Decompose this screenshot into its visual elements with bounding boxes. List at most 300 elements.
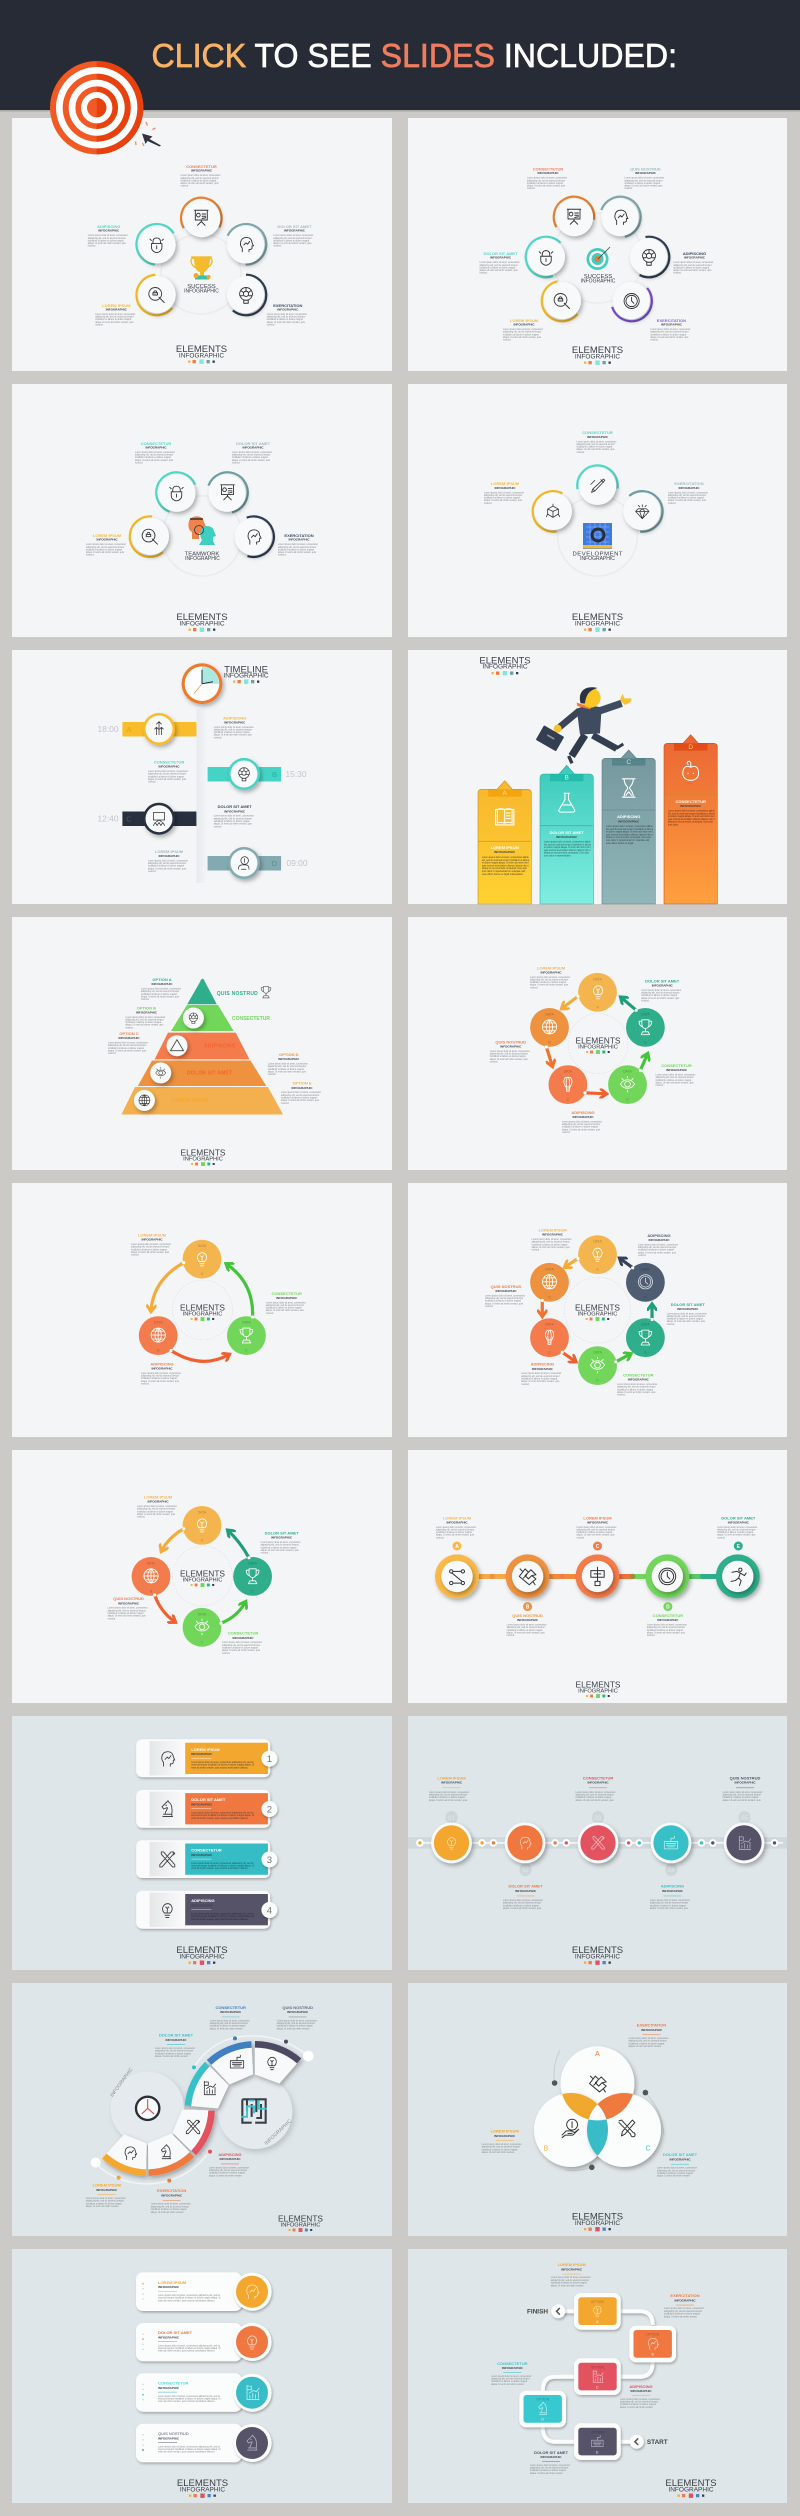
panel: slide 16 overlapping circles — [408, 1983, 787, 2236]
card 1: eiusmod tempor incididunt ut labore et dolore magna aliqua. Ut — [158, 2297, 221, 2300]
text block: dolor sit amet: aliqua. Ut enim ad minim veniam, quis — [667, 1320, 706, 1323]
pyramid layers — [121, 979, 283, 1114]
text block: consectetur: aliqua. Ut enim ad minim veniam, quis — [576, 448, 615, 451]
text block: lorem ipsum: adipiscing elit, sed do eiusmod tempor — [86, 2200, 124, 2203]
text block: quis nostrud: QUIS NOSTRUD — [113, 1596, 144, 1601]
icon: chess knight — [161, 2145, 171, 2159]
node A: A — [201, 1272, 204, 1276]
text block: lorem ipsum C: INFOGRAPHIC — [587, 1520, 609, 1524]
text block: exercitation: Lorem ipsum dolor sit amet, consectetur — [664, 2307, 704, 2310]
text block: lorem ipsum: INFOGRAPHIC — [561, 2267, 583, 2271]
box C: C — [596, 2385, 599, 2389]
text block: consectetur: CONSECTETUR — [228, 1631, 258, 1636]
text block: quis nostrud: adipiscing elit, sed do eiusmod tempor — [507, 1626, 545, 1629]
text block: lorem ipsum: adipiscing elit, sed do eiusmod tempor — [429, 1794, 468, 1797]
text block: lorem ipsum: nostrud. — [86, 554, 95, 557]
text block: option D: incididunt ut labore et dolore magna — [268, 1068, 304, 1071]
text block: option E: incididunt ut labore et dolore magna — [281, 1096, 318, 1099]
text block: exercitation: adipiscing elit, sed do eiusmod tempor — [668, 494, 707, 497]
text block: dolor sit amet: aliqua. Ut enim ad minim veniam, quis — [641, 997, 680, 1000]
text block: consectetur: CONSECTETUR — [186, 164, 217, 169]
center logo: INFOGRAPHIC — [578, 1311, 617, 1317]
text block: option D: OPTION D — [279, 1052, 299, 1057]
text block: lorem ipsum — [86, 2182, 126, 2208]
panel: slide 6 bars and runner — [408, 650, 787, 904]
text block: consectetur: adipiscing elit, sed do eiusmod tempor — [135, 454, 174, 457]
text block: adipiscing: aliqua. Ut enim ad minim veniam. — [209, 2174, 243, 2177]
node: lock — [150, 467, 203, 519]
text block: lorem ipsum: Lorem ipsum dolor sit amet, consectetur — [551, 2276, 591, 2279]
text block: adipiscing: ADIPISCING — [97, 224, 120, 229]
text block: quis nostrud: Lorem ipsum dolor sit amet, consectetur — [490, 1050, 530, 1053]
text block: quis nostrud: QUIS NOSTRUD — [495, 1039, 526, 1044]
text block: quis nostrud: aliqua. Ut enim ad minim veniam. — [277, 2027, 310, 2030]
center title — [581, 274, 616, 284]
card 2: Lorem ipsum dolor sit amet, consectetur adipiscing elit, sed do — [158, 2344, 221, 2347]
card 4: INFOGRAPHIC — [158, 2436, 180, 2440]
text block: dolor sit amet: nostrud. — [717, 1536, 726, 1539]
panel: slide 5 timeline — [12, 650, 392, 904]
text block: exercitation: adipiscing elit, sed do eiusmod tempor — [267, 316, 305, 319]
text block: adipiscing lower — [521, 1362, 562, 1386]
bar A: irure dolor in reprehenderit in voluptate velit — [482, 870, 526, 873]
text block: consectetur: nostrud. — [656, 1084, 664, 1087]
node C — [530, 1318, 569, 1357]
bar D: CONSECTETUR — [675, 799, 706, 804]
node B — [530, 1263, 569, 1302]
text block: lorem ipsum: incididunt ut labore et dolore magna — [429, 1796, 466, 1799]
text block: exercitation: aliqua. Ut enim ad minim veniam. — [664, 2315, 698, 2318]
text block: quis nostrud: QUIS NOSTRUD — [630, 166, 661, 172]
node: diamond — [614, 483, 671, 540]
footer logo — [177, 2478, 228, 2498]
text block: lorem ipsum: LOREM IPSUM — [93, 2182, 121, 2188]
disc 2 — [505, 1822, 545, 1863]
node B — [530, 1008, 569, 1047]
text block: dolor sit amet: DOLOR SIT AMET — [218, 804, 252, 809]
footer logo: INFOGRAPHIC — [179, 620, 225, 628]
center logo — [575, 1302, 620, 1321]
row D: band and node: 09:00 — [287, 858, 308, 868]
text block: consectetur — [222, 1631, 262, 1655]
card 2: INFOGRAPHIC — [158, 2335, 180, 2339]
footer logo: INFOGRAPHIC — [575, 1954, 620, 1960]
text block: dolor sit amet: DOLOR SIT AMET — [534, 2450, 569, 2455]
text block: dolor sit amet — [503, 1884, 543, 1910]
node A: A — [201, 1538, 204, 1542]
node: head — [594, 191, 646, 243]
card 3: enim ad minim veniam, quis nostrud exercitation ullamco. — [158, 2400, 216, 2403]
text block: adipiscing: nostrud. — [214, 736, 222, 739]
text block: option A — [141, 977, 181, 1001]
text block: quis nostrud: incididunt ut labore et dolore magna — [485, 1300, 522, 1303]
card 2: DOLOR SIT AMET — [158, 2330, 193, 2335]
text block: consectetur: INFOGRAPHIC — [146, 445, 167, 449]
node: pen — [574, 462, 621, 509]
card 1 — [136, 2272, 272, 2311]
text block: option D: aliqua. Ut enim ad minim veniam, quis — [268, 1071, 307, 1074]
text block: dolor sit amet: nostrud. — [480, 272, 488, 275]
number tabs: 05 — [741, 1816, 748, 1822]
bar B: B — [565, 775, 569, 782]
text block: adipiscing: Lorem ipsum dolor sit amet, consectetur — [214, 726, 254, 729]
layer labels: LOREM IPSUM — [171, 1098, 208, 1104]
text block: lorem ipsum C: aliqua. Ut enim ad minim veniam, quis — [576, 1534, 615, 1537]
text block: quis nostrud: Lorem ipsum dolor sit amet, consectetur — [507, 1624, 547, 1627]
node: top presentation — [174, 190, 229, 246]
text block: adipiscing: adipiscing elit, sed do eiusmod tempor — [620, 2401, 659, 2404]
text block: lorem ipsum: INFOGRAPHIC — [148, 1500, 169, 1504]
text block: adipiscing: nostrud. — [141, 1383, 150, 1386]
text block: quis nostrud: incididunt ut labore et dolore magna — [507, 1629, 543, 1632]
text block: consectetur: INFOGRAPHIC — [220, 2010, 242, 2014]
header banner — [0, 0, 800, 112]
arrow: C to D — [219, 1602, 246, 1625]
node B: DATA — [545, 1267, 555, 1271]
text block: consectetur: incididunt ut labore et dolore magna — [576, 446, 613, 449]
text block: consectetur — [647, 1613, 687, 1637]
text block: adipiscing — [562, 1110, 602, 1134]
text block: option A: OPTION A — [152, 977, 172, 982]
arrow: E to A — [621, 997, 638, 1012]
text block: dolor sit amet: INFOGRAPHIC — [677, 1307, 699, 1311]
text block: dolor sit amet: aliqua. Ut enim ad minim veniam, quis — [480, 269, 518, 272]
node B: DATA — [154, 1321, 163, 1325]
text block: dolor sit amet: DOLOR SIT AMET — [645, 978, 680, 983]
node D — [608, 1065, 647, 1104]
thin orbit arcs with markers — [554, 2050, 664, 2171]
card 1: 1 — [267, 1754, 272, 1765]
text block: lorem ipsum C: adipiscing elit, sed do eiusmod tempor — [576, 1528, 615, 1531]
text block: consectetur: Lorem ipsum dolor sit amet, consectetur — [527, 177, 567, 180]
node D: DATA — [248, 1561, 258, 1565]
text block: option B: adipiscing elit, sed do eiusmod tempor — [125, 1018, 164, 1021]
text block: dolor sit amet: Lorem ipsum dolor sit amet, consectetur — [261, 1541, 301, 1544]
text block: consectetur: adipiscing elit, sed do eiusmod tempor — [491, 2378, 530, 2381]
text block: exercitation — [267, 303, 307, 326]
text block: option D: Lorem ipsum dolor sit amet, consectetur — [268, 1063, 308, 1066]
text block: exercitation — [650, 318, 691, 342]
text block: lorem ipsum: LOREM IPSUM — [138, 1232, 167, 1238]
text block: lorem ipsum — [532, 1228, 572, 1252]
text block: option C: aliqua. Ut enim ad minim veniam, quis — [108, 1050, 147, 1053]
text block: option E: nostrud. — [281, 1102, 290, 1105]
text block: lorem ipsum: Lorem ipsum dolor sit amet, consectetur — [484, 491, 524, 494]
text block: dolor sit amet: nostrud. — [667, 1323, 675, 1326]
text block: lorem ipsum: incididunt ut labore et dolore magna — [530, 981, 567, 984]
center logo: INFOGRAPHIC — [578, 1044, 618, 1050]
row D: band and node: D — [272, 859, 278, 868]
node D: D — [251, 1589, 254, 1593]
text block: exercitation: adipiscing elit, sed do eiusmod tempor — [650, 331, 689, 334]
number tabs: 04 — [668, 1868, 675, 1874]
text block: consectetur: INFOGRAPHIC — [666, 1068, 688, 1072]
text block: consectetur: incididunt ut labore et dolore magna — [210, 2025, 246, 2028]
text block: option C: OPTION C — [119, 1031, 139, 1036]
row A: band and node — [98, 713, 196, 745]
text block: dolor sit amet: nostrud. — [214, 825, 222, 828]
row B: band and node — [208, 758, 307, 790]
connectors — [543, 2311, 653, 2442]
text block: lorem ipsum: INFOGRAPHIC — [514, 323, 535, 327]
text block: option A: nostrud. — [141, 998, 150, 1001]
text block: option C: Lorem ipsum dolor sit amet, consectetur — [108, 1042, 148, 1045]
text block: lorem ipsum: adipiscing elit, sed do eiusmod tempor — [530, 978, 569, 981]
text block: quis nostrud: QUIS NOSTRUD — [512, 1613, 543, 1618]
bar C: et dolore magna aliqua. Ut enim ad minim veni — [606, 831, 653, 834]
icon: crossed tools — [186, 2120, 200, 2134]
text block: dolor sit amet: adipiscing elit, sed do eiusmod tempor — [261, 1544, 299, 1547]
text block: adipiscing: INFOGRAPHIC — [152, 1367, 173, 1371]
text block: quis nostrud: aliqua. Ut enim ad minim veniam, quis — [108, 1615, 146, 1618]
icon disc: warning — [166, 1035, 188, 1056]
bar C: quis nostrud exercitation ullamco laboris nisi ut — [606, 833, 653, 836]
box B: B — [652, 2353, 655, 2357]
text block: lorem ipsum: adipiscing elit, sed do eiusmod tempor — [95, 316, 134, 319]
arrow: B to C — [169, 1349, 229, 1361]
text block: dolor sit amet: aliqua. Ut enim ad minim veniam, quis. — [503, 1907, 542, 1910]
text block: lorem ipsum A: LOREM IPSUM — [443, 1515, 472, 1520]
text block: dolor sit amet: INFOGRAPHIC — [540, 2455, 562, 2459]
text block: consectetur: Lorem ipsum dolor sit amet, consectetur — [647, 1624, 687, 1627]
node E: E — [644, 1351, 647, 1355]
node A: DATA — [198, 1244, 207, 1248]
box A — [574, 2293, 621, 2330]
text block: dolor sit amet: aliqua. Ut enim ad minim veniam, quis — [273, 242, 312, 245]
text block: dolor sit amet — [657, 2152, 698, 2178]
title: INFOGRAPHIC — [223, 672, 269, 680]
text block: option C: adipiscing elit, sed do eiusmod tempor — [108, 1044, 147, 1047]
center title — [572, 552, 623, 562]
text block: dolor sit amet: Lorem ipsum dolor sit amet, consectetur — [232, 451, 272, 454]
text block: lorem ipsum: Lorem ipsum dolor sit amet, consectetur — [86, 543, 126, 546]
text block: adipiscing: INFOGRAPHIC — [662, 1889, 684, 1893]
bar B: DOLOR SIT AMET — [550, 830, 584, 835]
footer logo: INFOGRAPHIC — [668, 2486, 714, 2494]
text block: lorem ipsum: LOREM IPSUM — [93, 533, 122, 538]
text block: quis nostrud — [490, 1039, 530, 1064]
icon disc: eye — [150, 1062, 171, 1083]
bar A: LOREM IPSUM — [491, 845, 519, 850]
text block: exercitation — [668, 481, 708, 505]
text block: lorem ipsum: Lorem ipsum dolor sit amet, consectetur — [503, 328, 543, 331]
disc 5 — [724, 1822, 764, 1863]
text block: lorem ipsum: Lorem ipsum dolor sit amet, consectetur — [131, 1243, 171, 1246]
text block: exercitation: adipiscing elit, sed do eiusmod tempor — [278, 546, 317, 549]
text block: consectetur: CONSECTETUR — [653, 1613, 683, 1618]
text block: adipiscing top: nostrud. — [638, 1254, 647, 1257]
node C: DATA — [564, 1070, 573, 1074]
text block: dolor sit amet: adipiscing elit, sed do eiusmod tempor — [530, 2467, 569, 2470]
center title: INFOGRAPHIC — [184, 288, 219, 294]
text block: option B — [125, 1005, 166, 1029]
text block: consectetur: incididunt ut labore et dolore magna — [656, 1079, 692, 1082]
text block: consectetur: aliqua. Ut enim ad minim veniam, quis — [266, 1309, 305, 1312]
footer logo: ELEMENTS — [665, 2478, 717, 2489]
card 2: enim ad minim veniam, quis nostrud exercitation ullamco. — [191, 1817, 249, 1820]
text block: lorem ipsum: LOREM IPSUM — [437, 1775, 466, 1780]
text block: consectetur: Lorem ipsum dolor sit amet, consectetur — [135, 451, 175, 454]
text block: quis nostrud — [277, 2005, 317, 2030]
disc 4 — [651, 1822, 691, 1863]
box B: OPTION — [646, 2333, 660, 2337]
panel: slide 8 five-step cycle — [408, 917, 787, 1170]
node: search — [121, 508, 179, 565]
text block: consectetur — [148, 760, 188, 784]
text block: consectetur: CONSECTETUR — [661, 1063, 692, 1068]
venn letters: C — [645, 2146, 651, 2152]
text block: dolor sit amet — [641, 978, 681, 1002]
card 3: Lorem ipsum dolor sit amet, consectetur adipiscing elit, sed do — [158, 2395, 221, 2398]
text block: consectetur: incididunt ut labore et dolore magna — [617, 1388, 654, 1391]
bar D: elit, sed do eiusmod tempor incididunt ut labore — [668, 812, 716, 815]
text block: adipiscing: incididunt ut labore et dolore magna — [620, 2403, 657, 2406]
text block: dolor sit amet: INFOGRAPHIC — [490, 256, 512, 260]
text block: lorem ipsum: adipiscing elit, sed do eiusmod tempor — [482, 2146, 520, 2149]
text block: dolor sit amet: INFOGRAPHIC — [652, 984, 674, 988]
text block: consectetur: Lorem ipsum dolor sit amet, consectetur — [491, 2375, 532, 2378]
center title: TEAMWORK — [185, 552, 219, 558]
node: presentation — [201, 467, 254, 519]
text block: consectetur — [576, 1775, 616, 1802]
text block: adipiscing top — [638, 1233, 678, 1257]
text block: quis nostrud: Lorem ipsum dolor sit amet, consectetur — [722, 1791, 763, 1794]
node E: DATA — [641, 1323, 650, 1327]
text block: dolor sit amet: DOLOR SIT AMET — [483, 251, 518, 256]
text block: lorem ipsum — [530, 965, 570, 989]
text block: exercitation: adipiscing elit, sed do eiusmod tempor — [628, 2040, 667, 2043]
text block: adipiscing: ADIPISCING — [661, 1884, 684, 1888]
card 2 — [136, 2323, 272, 2361]
text block: exercitation: adipiscing elit, sed do eiusmod tempor — [664, 2310, 703, 2313]
text block: dolor sit amet: INFOGRAPHIC — [515, 1889, 537, 1893]
bar A: INFOGRAPHIC — [494, 850, 516, 854]
text block: lorem ipsum — [551, 2262, 591, 2287]
bar D: quis nostrud exercitation ullamco laboris nisi ut — [668, 818, 715, 821]
number tabs — [446, 1811, 750, 1876]
text block: dolor sit amet: aliqua. Ut enim ad minim veniam. — [530, 2472, 564, 2475]
text block: adipiscing: nostrud. — [562, 1131, 571, 1134]
text block: dolor sit amet: DOLOR SIT AMET — [671, 1302, 705, 1307]
text block: dolor sit amet: aliqua. Ut enim ad minim veniam. — [155, 2055, 189, 2058]
text block: consectetur: INFOGRAPHIC — [538, 171, 559, 175]
text block: adipiscing: adipiscing elit, sed do eiusmod tempor — [673, 264, 712, 267]
text block: consectetur: adipiscing elit, sed do eiusmod tempor — [266, 1304, 304, 1307]
text block: lorem ipsum: aliqua. Ut enim ad minim veniam, quis. — [429, 1799, 468, 1802]
node B: B — [150, 1589, 153, 1593]
card 4: Lorem ipsum dolor sit amet, consectetur adipiscing elit, sed do — [158, 2445, 221, 2448]
arrow: F to A — [620, 1258, 634, 1269]
number tabs: 02 — [522, 1868, 529, 1874]
node B — [139, 1316, 178, 1355]
text block: exercitation: incididunt ut labore et dolore magna — [650, 333, 687, 336]
text block: exercitation: nostrud. — [267, 323, 275, 326]
text block: adipiscing: aliqua. Ut enim ad minim veniam, quis. — [650, 1907, 689, 1910]
text block: option D: adipiscing elit, sed do eiusmod tempor — [268, 1065, 306, 1068]
panel: slide 2 six-node success — [408, 118, 787, 371]
text block: consectetur — [527, 166, 567, 190]
text block: consectetur: nostrud. — [647, 1634, 655, 1637]
row D: band and node — [208, 847, 308, 879]
text block: consectetur: Lorem ipsum dolor sit amet, consectetur — [180, 174, 221, 177]
text block: adipiscing: aliqua. Ut enim ad minim veniam, quis — [214, 734, 253, 737]
node F: DATA — [641, 1267, 650, 1271]
row B: band and node: B — [272, 770, 277, 779]
text block: option A: adipiscing elit, sed do eiusmod tempor — [141, 990, 180, 993]
footer logo: INFOGRAPHIC — [575, 2220, 620, 2227]
text block: exercitation: EXERCITATION — [674, 481, 704, 486]
text block: dolor sit amet: incididunt ut labore et dolore magna — [657, 2172, 694, 2175]
card 1: INFOGRAPHIC — [191, 1752, 213, 1756]
footer logo: INFOGRAPHIC — [180, 2486, 225, 2494]
icon: target with dart — [586, 247, 610, 270]
card 2: DOLOR SIT AMET — [191, 1797, 226, 1802]
text block: consectetur: INFOGRAPHIC — [628, 1378, 650, 1382]
text block: lorem ipsum: Lorem ipsum dolor sit amet, consectetur — [86, 2197, 126, 2200]
text block: quis nostrud: aliqua. Ut enim ad minim veniam, quis — [624, 185, 663, 188]
letter badges: B — [526, 1604, 530, 1610]
text block: consectetur: incididunt ut labore et dolore magna — [148, 775, 185, 778]
card 3: eiusmod tempor incididunt ut labore et dolore magna aliqua. Ut — [191, 1864, 254, 1868]
text block: adipiscing: adipiscing elit, sed do eiusmod tempor — [141, 1375, 180, 1378]
center logo — [576, 1036, 621, 1054]
panel: slide 18 snake path — [408, 2249, 787, 2503]
text block: lorem ipsum A: INFOGRAPHIC — [446, 1520, 468, 1524]
text block: lorem ipsum: aliqua. Ut enim ad minim veniam. — [482, 2151, 515, 2154]
layer labels: DOLOR SIT AMET — [187, 1071, 232, 1077]
bar D: et dolore magna aliqua. Ut enim ad minim veni — [668, 815, 715, 818]
bar C: aliquip ex ea commodo consequat. Duis aute — [606, 836, 652, 839]
text block: adipiscing lower: ADIPISCING — [531, 1362, 554, 1367]
text block: quis nostrud: adipiscing elit, sed do eiusmod tempor — [108, 1609, 146, 1612]
text block: consectetur: aliqua. Ut enim ad minim veniam, quis — [180, 182, 219, 185]
panel: slide 3 teamwork — [12, 384, 392, 637]
node 3 — [576, 1554, 620, 1598]
text block: lorem ipsum: incididunt ut labore et dolore magna — [95, 318, 132, 321]
text block: consectetur: nostrud. — [135, 461, 144, 464]
node: presentation — [546, 189, 602, 245]
text block: lorem ipsum: adipiscing elit, sed do eiusmod tempor — [503, 331, 542, 334]
text block: lorem ipsum A — [436, 1515, 476, 1539]
text block: lorem ipsum: incididunt ut labore et dolore magna — [86, 2202, 122, 2205]
text block: consectetur: incididunt ut labore et dolore magna — [222, 1646, 259, 1649]
text block: adipiscing: aliqua. Ut enim ad minim veniam, quis — [88, 242, 127, 245]
text block: exercitation: INFOGRAPHIC — [288, 538, 310, 542]
text block: lorem ipsum — [484, 481, 524, 505]
box D: D — [541, 2418, 544, 2422]
text block: lorem ipsum: incididunt ut labore et dolore magna — [148, 865, 185, 868]
text block: exercitation: incididunt ut labore et dolore magna — [628, 2042, 665, 2045]
text block: exercitation: EXERCITATION — [637, 2022, 666, 2028]
text block: lorem ipsum: incididunt ut labore et dolore magna — [482, 2148, 518, 2151]
arrow: A to B — [151, 1261, 185, 1311]
card 1: Lorem ipsum dolor sit amet, consectetur adipiscing elit, sed do — [191, 1761, 254, 1764]
card 4: enim ad minim veniam, quis nostrud exercitation ullamco. — [191, 1918, 249, 1921]
text block: quis nostrud — [722, 1775, 763, 1802]
text block: exercitation: INFOGRAPHIC — [277, 307, 299, 311]
text block: lorem ipsum: nostrud. — [95, 323, 104, 326]
text block: option D: nostrud. — [268, 1073, 276, 1076]
text block: dolor sit amet: DOLOR SIT AMET — [663, 2152, 698, 2157]
text block: dolor sit amet: incididunt ut labore et dolore magna — [530, 2469, 567, 2472]
node C: C — [548, 1351, 551, 1355]
center logo: ELEMENTS — [576, 1036, 621, 1045]
text block: dolor sit amet: DOLOR SIT AMET — [277, 224, 312, 229]
text block: consectetur: adipiscing elit, sed do eiusmod tempor — [576, 1794, 614, 1797]
text block: adipiscing: Lorem ipsum dolor sit amet, consectetur — [562, 1120, 602, 1123]
text block: adipiscing: nostrud. — [88, 245, 96, 248]
text block: lorem ipsum: aliqua. Ut enim ad minim veniam, quis — [532, 1246, 570, 1249]
